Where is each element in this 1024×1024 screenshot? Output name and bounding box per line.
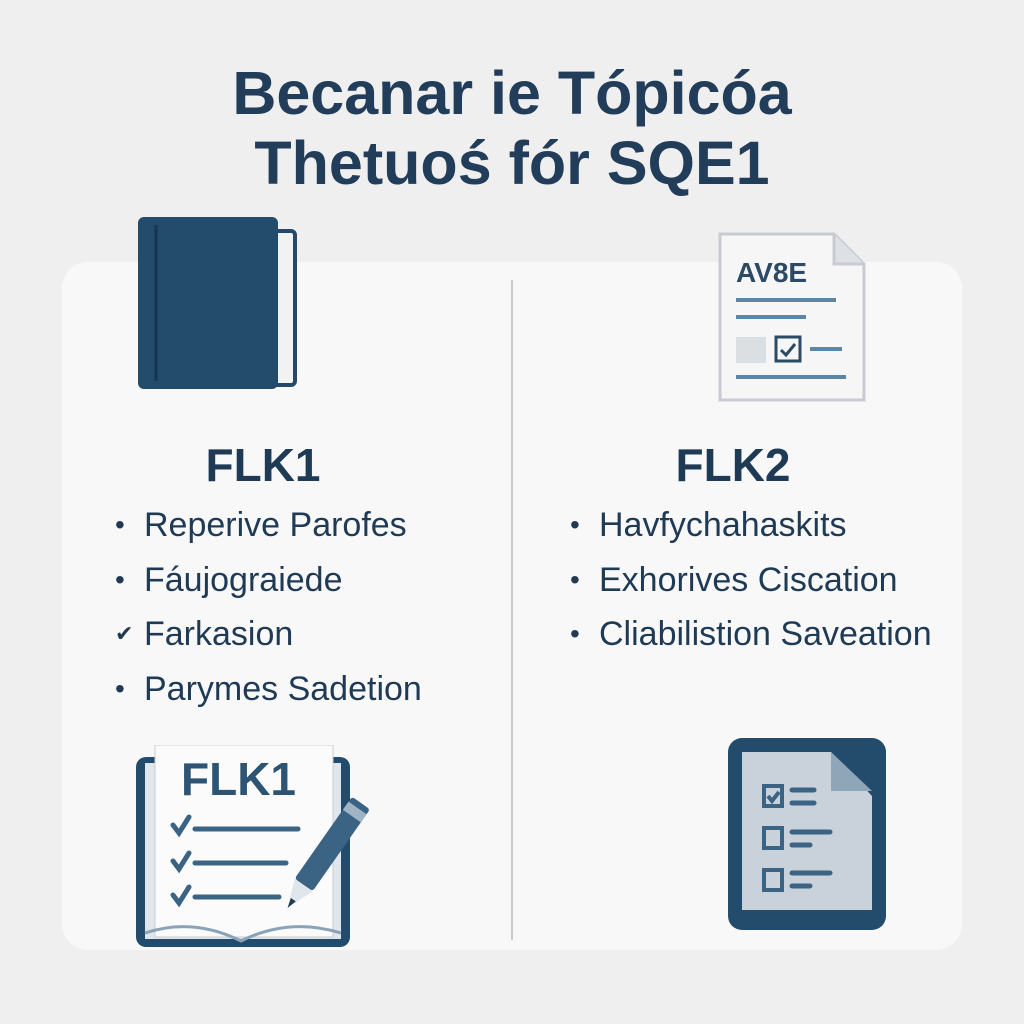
list: FLK1: Reperive Parofes <box>144 506 407 544</box>
title: Becanar ie Tópicóa <box>232 59 792 127</box>
list: FLK2: Cliabilistion Saveation <box>599 615 932 653</box>
icon: FLK1 checklist book <box>136 745 369 947</box>
icon: checklist tablet <box>728 738 886 930</box>
list: FLK1: Parymes Sadetion <box>144 670 422 708</box>
title: Thetuoś fór SQE1 <box>254 129 770 197</box>
divider <box>511 280 513 940</box>
list: FLK1 <box>116 506 422 708</box>
icon: FLK1 checklist book: FLK1 <box>181 753 296 805</box>
icon: document AV8E <box>718 232 866 402</box>
list: FLK1: Fáujograiede <box>144 560 342 598</box>
heading: FLK2: FLK2 <box>676 439 790 491</box>
list: FLK1: Farkasion <box>144 615 293 653</box>
heading: FLK1: FLK1 <box>206 439 320 491</box>
list: FLK2: Exhorives Ciscation <box>599 560 898 598</box>
icon: book <box>138 217 297 389</box>
title <box>232 59 792 197</box>
list: FLK2: Havfychahaskits <box>599 506 847 544</box>
list: FLK2 <box>571 506 932 653</box>
panel <box>62 262 962 950</box>
icon: document AV8E: AV8E <box>736 257 807 288</box>
